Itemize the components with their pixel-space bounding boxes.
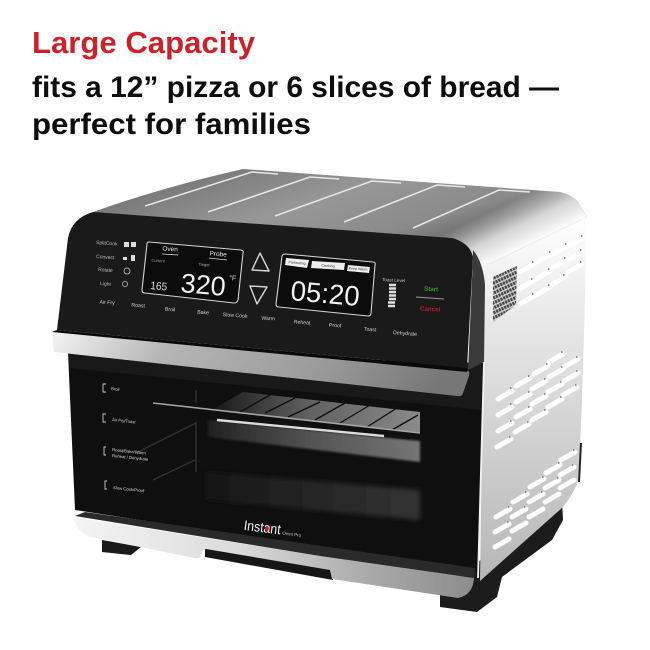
door glow — [206, 472, 420, 520]
silver handle band — [52, 331, 469, 396]
status tabs: Preheating — [288, 260, 306, 266]
door rack guide labels: Broil — [111, 386, 120, 392]
oven display: 320 — [179, 268, 227, 302]
mode labels: Warm — [261, 316, 275, 322]
oven display: 165 — [150, 280, 168, 293]
function labels: Rotate — [98, 267, 113, 274]
oven display: Oven — [162, 245, 178, 254]
door — [68, 352, 484, 572]
side vents — [495, 238, 583, 547]
toast level — [382, 277, 405, 306]
oven display — [142, 242, 243, 303]
door rack guide labels: Reheat / Dehydrate — [112, 453, 149, 462]
function icons — [122, 242, 136, 287]
logo: Instant — [243, 517, 282, 537]
subtitle text block — [32, 71, 559, 141]
mode labels: Bake — [197, 310, 209, 316]
mode labels: Reheat — [294, 319, 311, 327]
vent screws — [507, 236, 582, 522]
interior heating band — [208, 420, 420, 462]
rack — [153, 392, 420, 438]
side panel base — [470, 205, 587, 581]
top vent slots — [145, 172, 530, 228]
side edge — [579, 443, 581, 482]
door reflections — [136, 390, 196, 480]
oven display: Target — [198, 262, 211, 267]
mode labels: Slow Cook — [222, 312, 248, 320]
bottom silver strip — [205, 546, 333, 580]
status tabs — [285, 258, 370, 273]
status tabs: Keep Warm — [349, 266, 368, 272]
start and cancel: Start — [424, 286, 438, 293]
oven display: Probe — [209, 250, 227, 259]
door rack guide labels: Air Fry/Toast — [112, 417, 137, 425]
status tabs: Cooking — [321, 264, 335, 268]
function labels: Convect — [96, 254, 115, 261]
toast level: Toast Level — [382, 277, 405, 283]
door rack guide labels — [103, 384, 149, 493]
side panel details — [493, 236, 583, 547]
mode labels: Proof — [329, 323, 342, 329]
function labels: SplitCook — [96, 240, 118, 248]
right foot and base — [440, 500, 563, 612]
door frame and top shade — [68, 352, 484, 410]
logo: Omni Pro — [282, 531, 302, 538]
mode labels: Air Fry — [99, 299, 115, 307]
top of oven — [93, 169, 587, 269]
door rack guide labels: Slow Cook/Proof — [113, 485, 145, 493]
air fryer oven — [52, 169, 587, 612]
oven display: Current — [151, 258, 166, 264]
mode labels: Broil — [165, 307, 175, 313]
oven display: °F — [229, 274, 237, 283]
left foot — [102, 540, 141, 555]
temperature up and down arrows — [250, 253, 269, 304]
door rack guide labels: Roast/Bake/Warm — [112, 447, 147, 456]
logo — [243, 517, 303, 540]
control panel — [52, 212, 485, 372]
function labels: Light — [100, 281, 112, 288]
side grille — [493, 266, 517, 322]
mode labels: Dehydrate — [393, 330, 417, 338]
subtitle text block: fits a 12” pizza or 6 slices of bread — — [32, 71, 559, 104]
mode labels — [99, 299, 417, 338]
timer display: 05:20 — [289, 275, 361, 312]
timer display — [276, 254, 375, 316]
mode labels: Toast — [364, 327, 377, 333]
mode labels: Roast — [131, 303, 146, 310]
title: Large Capacity: Large Capacity — [32, 25, 256, 60]
function labels — [96, 240, 118, 288]
start and cancel — [416, 286, 444, 314]
start and cancel: Cancel — [420, 305, 441, 314]
subtitle text block: perfect for families — [32, 108, 311, 141]
